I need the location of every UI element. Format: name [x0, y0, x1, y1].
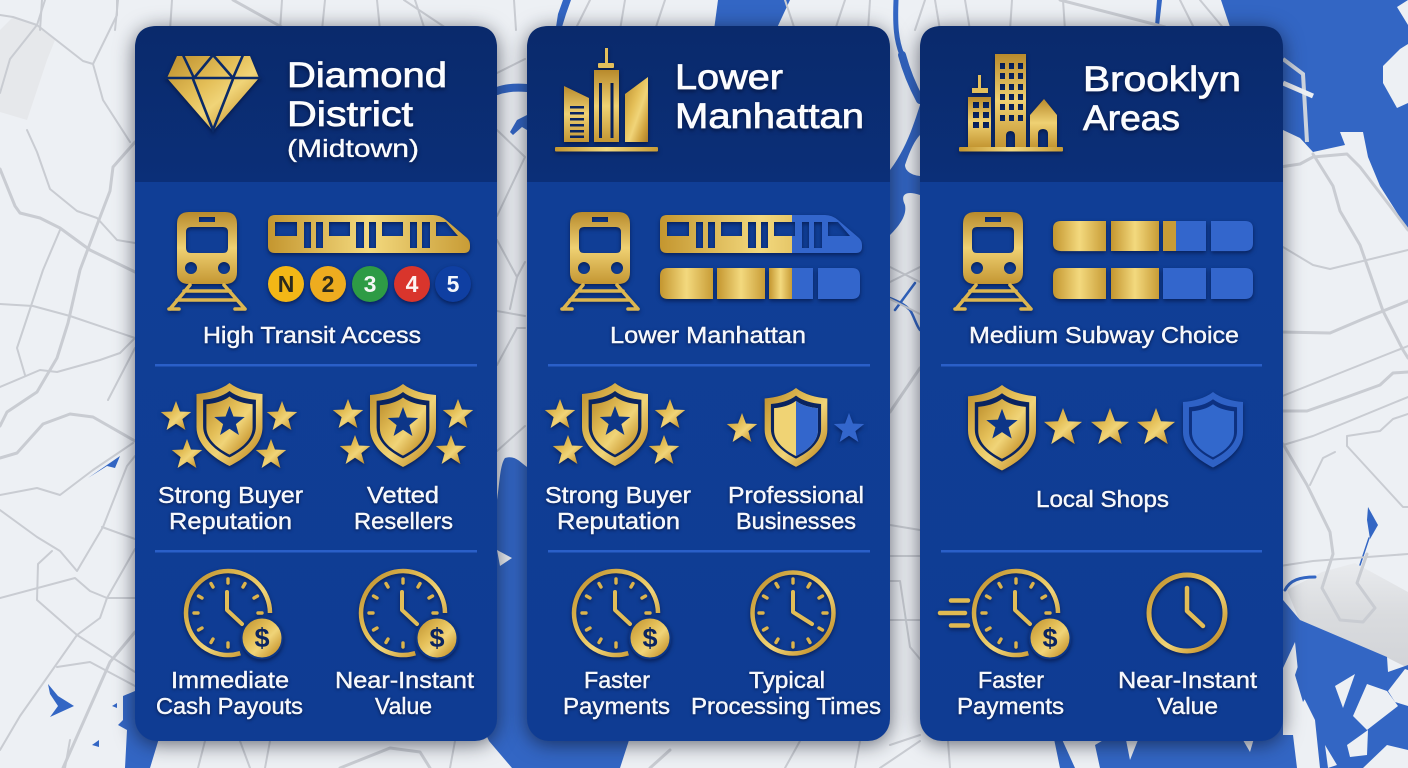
- label: Immediate Cash Payouts: Cash Payouts: [156, 693, 303, 719]
- panel 2 header band: [527, 26, 890, 182]
- icon: shield with five stars: [161, 383, 297, 468]
- label: Faster Payments: [957, 667, 1064, 719]
- icon: clock with dollar coin: [186, 571, 282, 658]
- label: Faster Payments: Payments: [957, 693, 1064, 719]
- label: Vetted Resellers: Vetted: [367, 482, 439, 508]
- label: Faster Payments: Faster: [978, 667, 1044, 693]
- label: Typical Processing Times: Typical: [749, 667, 825, 693]
- heading: Brooklyn Areas: Areas: [1083, 99, 1180, 138]
- icon: fast clock with coin: $: [1042, 623, 1058, 653]
- heading: Lower Manhattan: Manhattan: [675, 97, 864, 136]
- subway line badges: 4: [406, 271, 419, 297]
- label: Near-Instant Value: Value: [1157, 693, 1218, 719]
- label: Typical Processing Times: Processing Times: [691, 693, 881, 719]
- label: Lower Manhattan: Lower Manhattan: [610, 322, 806, 348]
- heading: Lower Manhattan: Lower: [675, 58, 783, 97]
- icon: train: [955, 212, 1031, 309]
- icon: clock: [752, 572, 834, 654]
- panel: Lower Manhattan: [527, 26, 890, 741]
- label: Immediate Cash Payouts: Immediate: [171, 667, 289, 693]
- icon: diamond: [165, 55, 261, 131]
- label: Near-Instant Value: Value: [375, 693, 432, 719]
- label: Professional Businesses: Businesses: [736, 508, 856, 534]
- icon: gold shield, three stars, blue shield: [968, 385, 1243, 470]
- segmented bar: upper: [1053, 221, 1253, 251]
- icon: part-filled metro car: [660, 215, 862, 253]
- panel 1 background: [135, 26, 497, 741]
- icon: metro car: [268, 215, 470, 253]
- label: Typical Processing Times: [691, 667, 881, 719]
- label: Strong Buyer Reputation: [545, 482, 691, 534]
- label: Vetted Resellers: Resellers: [354, 508, 453, 534]
- label: Professional Businesses: [728, 482, 864, 534]
- subway line badges: N: [278, 271, 294, 297]
- label: Strong Buyer Reputation: Strong Buyer: [545, 482, 691, 508]
- subway line badges: 5: [447, 271, 460, 297]
- icon: clock with dollar coin: $: [642, 623, 658, 653]
- label: Strong Buyer Reputation: Reputation: [169, 508, 292, 534]
- segmented bar: [660, 268, 860, 299]
- icon: shield with five stars: [545, 383, 685, 466]
- heading: Brooklyn Areas: Brooklyn: [1083, 60, 1241, 99]
- icon: clock with dollar coin: [361, 571, 458, 658]
- segmented bar: lower: [1053, 268, 1253, 299]
- heading: Diamond District (Midtown): [287, 56, 447, 163]
- label: Near-Instant Value: [1118, 667, 1258, 719]
- subway line badges: 3: [364, 271, 376, 297]
- panel: Diamond District: [135, 26, 497, 741]
- icon: plain clock: [1149, 575, 1225, 651]
- label: Professional Businesses: Professional: [728, 482, 864, 508]
- label: Strong Buyer Reputation: Reputation: [557, 508, 680, 534]
- label: Immediate Cash Payouts: [156, 667, 303, 719]
- label: Vetted Resellers: [354, 482, 453, 534]
- label: Medium Subway Choice: Medium Subway Choice: [969, 322, 1239, 348]
- label: Strong Buyer Reputation: [158, 482, 303, 534]
- label: Strong Buyer Reputation: Strong Buyer: [158, 482, 303, 508]
- panel 1 header band: [135, 26, 497, 182]
- label: High Transit Access: High Transit Access: [203, 322, 421, 348]
- icon: train: [562, 212, 638, 309]
- icon: Brooklyn buildings: [959, 54, 1063, 152]
- icon: clock with dollar coin: [574, 571, 670, 658]
- label: Local Shops: Local Shops: [1036, 486, 1169, 512]
- icon: clock with dollar coin: $: [429, 623, 445, 653]
- subway line badges: 2: [322, 271, 334, 297]
- label: Faster Payments: Payments: [563, 693, 670, 719]
- heading: Diamond District (Midtown): (Midtown): [287, 135, 419, 163]
- panel 2 background: [527, 26, 890, 741]
- heading: Brooklyn Areas: [1083, 60, 1241, 138]
- label: Near-Instant Value: Near-Instant: [1118, 667, 1258, 693]
- label: Near-Instant Value: [335, 667, 475, 719]
- label: Faster Payments: [563, 667, 670, 719]
- icon: train: [169, 212, 245, 309]
- icon: clock with dollar coin: $: [254, 623, 270, 653]
- icon: skyline: [555, 48, 658, 152]
- heading: Diamond District (Midtown): Diamond: [287, 56, 447, 95]
- heading: Lower Manhattan: [675, 58, 864, 136]
- panel: Brooklyn Areas: [920, 26, 1283, 741]
- icon: fast clock with coin: [940, 571, 1070, 658]
- panel 3 header band: [920, 26, 1283, 182]
- icon: half-filled shield with stars: [727, 388, 864, 467]
- subway line badges: [268, 266, 471, 302]
- icon: vetted shield: [333, 384, 473, 467]
- label: Faster Payments: Faster: [584, 667, 650, 693]
- heading: Diamond District (Midtown): District: [287, 95, 413, 134]
- label: Near-Instant Value: Near-Instant: [335, 667, 475, 693]
- panel 3 background: [920, 26, 1283, 741]
